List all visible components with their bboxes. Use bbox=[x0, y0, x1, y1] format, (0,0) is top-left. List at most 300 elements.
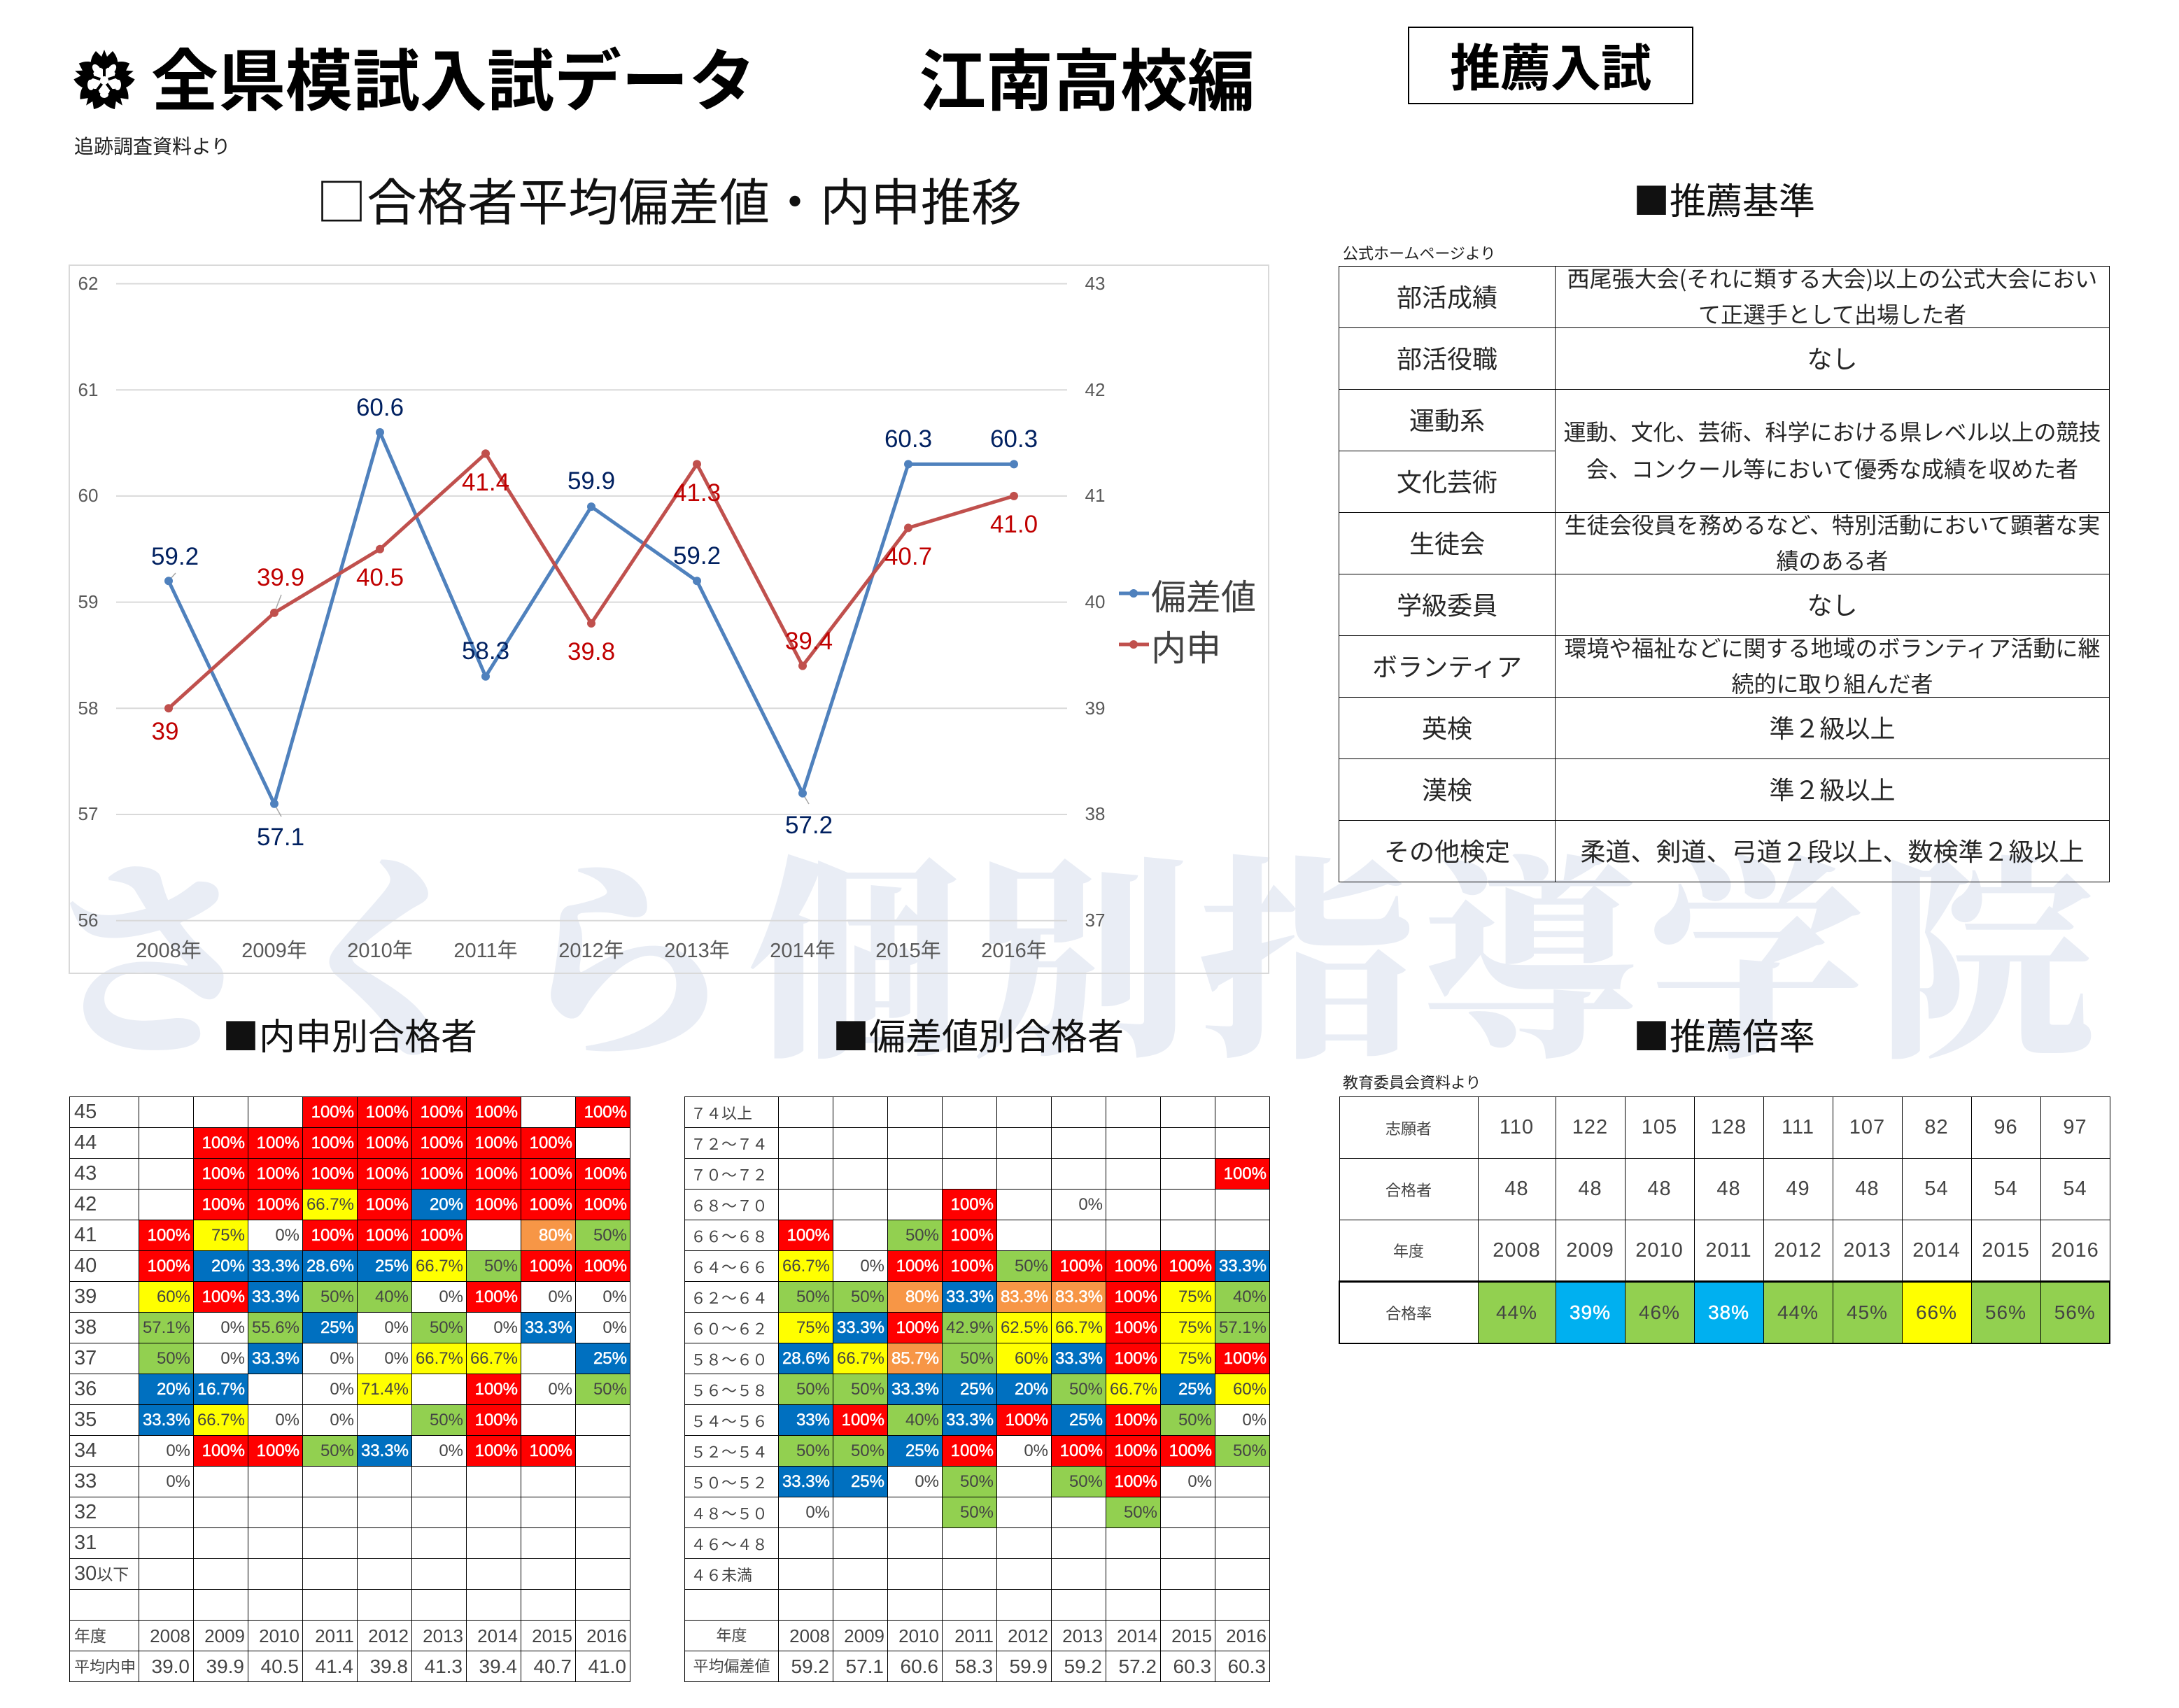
legend: 偏差値 bbox=[1151, 570, 1256, 620]
table: passers by deviation: 100% bbox=[1006, 1411, 1048, 1429]
table: passers by naishin: 50% bbox=[593, 1380, 627, 1398]
table: passers by deviation: ６８～７０ bbox=[691, 1194, 768, 1216]
table: passers by naishin: 55.6% bbox=[252, 1318, 299, 1336]
table: passers by deviation: 50% bbox=[851, 1287, 884, 1306]
table: passers by deviation: 50% bbox=[796, 1380, 830, 1398]
heading: passers by naishin: ■内申別合格者 bbox=[223, 1008, 477, 1060]
table: passers by deviation: 100% bbox=[1115, 1441, 1157, 1460]
table: recommendation ratio: 年度 bbox=[1393, 1239, 1424, 1262]
table: passers by naishin: 100% bbox=[257, 1441, 299, 1460]
table: recommendation criteria: 部活役職 bbox=[1397, 339, 1497, 375]
table: recommendation criteria: 生徒会役員を務めるなど、特別活動において顕著な実 bbox=[1565, 508, 2100, 540]
table: passers by naishin: 33.3% bbox=[252, 1257, 299, 1275]
data labels: deviation: 60.3 bbox=[884, 425, 932, 453]
table: recommendation criteria: 学級委員 bbox=[1397, 585, 1497, 621]
table: passers by naishin: 100% bbox=[475, 1380, 518, 1398]
badge: recommendation exam: 推薦入試 bbox=[1450, 27, 1651, 101]
table: passers by deviation: 2012 bbox=[1008, 1625, 1048, 1646]
data labels: deviation: 60.3 bbox=[990, 425, 1038, 453]
data labels: naishin: 39.9 bbox=[257, 564, 304, 591]
table: passers by naishin: 50% bbox=[430, 1318, 463, 1336]
legend: 内申 bbox=[1151, 621, 1221, 671]
table: passers by naishin: 100% bbox=[530, 1164, 572, 1183]
table: recommendation ratio: 107 bbox=[1849, 1116, 1885, 1138]
data labels: naishin: 39.4 bbox=[785, 628, 833, 655]
table: passers by naishin: 66.7% bbox=[416, 1349, 463, 1367]
table: passers by naishin: 66.7% bbox=[306, 1195, 354, 1213]
line chart: deviation and naishin: 39 bbox=[1085, 698, 1105, 719]
table: passers by naishin: 0% bbox=[602, 1287, 627, 1306]
table: passers by naishin: 100% bbox=[475, 1411, 518, 1429]
table: passers by deviation: 年度 bbox=[716, 1626, 747, 1644]
table: passers by naishin: 0% bbox=[439, 1287, 463, 1306]
table: recommendation ratio: 96 bbox=[1994, 1116, 2018, 1138]
table: passers by naishin: 43 bbox=[74, 1162, 97, 1185]
table: passers by naishin: 0% bbox=[439, 1441, 463, 1460]
table: passers by deviation: 0% bbox=[805, 1503, 830, 1521]
table: passers by deviation: 59.9 bbox=[1009, 1656, 1048, 1677]
line chart: deviation and naishin bbox=[69, 264, 1269, 974]
table: passers by deviation: 50% bbox=[960, 1472, 994, 1490]
table: passers by deviation: 100% bbox=[1169, 1257, 1212, 1275]
table: passers by deviation: 66.7% bbox=[837, 1349, 884, 1367]
table: passers by deviation: ６２～６４ bbox=[691, 1286, 768, 1308]
line chart: deviation and naishin: 58 bbox=[78, 698, 98, 719]
table: recommendation ratio: 39% bbox=[1570, 1301, 1611, 1323]
table: recommendation criteria: 部活成績 bbox=[1397, 277, 1497, 313]
table: passers by naishin: 0% bbox=[548, 1380, 572, 1398]
table: passers by naishin: 100% bbox=[421, 1164, 463, 1183]
table: passers by naishin: 2015 bbox=[532, 1625, 572, 1646]
table: passers by deviation: ６０～６２ bbox=[691, 1317, 768, 1339]
table: passers by naishin: 0% bbox=[602, 1318, 627, 1336]
table: passers by naishin: 2010 bbox=[259, 1625, 299, 1646]
table: passers by deviation: ４６未満 bbox=[691, 1563, 752, 1586]
table: passers by deviation: 2016 bbox=[1226, 1625, 1267, 1646]
table: passers by naishin: 0% bbox=[220, 1349, 245, 1367]
table: passers by naishin: 25% bbox=[375, 1257, 409, 1275]
table: passers by deviation: 0% bbox=[915, 1472, 939, 1490]
table: passers by naishin: 100% bbox=[311, 1226, 354, 1244]
table: passers by deviation: 57.2 bbox=[1118, 1656, 1157, 1677]
table: passers by naishin: 100% bbox=[530, 1441, 572, 1460]
table: passers by naishin: 33.3% bbox=[252, 1287, 299, 1306]
table: passers by naishin: 0% bbox=[548, 1287, 572, 1306]
line chart: deviation and naishin: 41 bbox=[1085, 485, 1105, 506]
data labels: deviation: 58.3 bbox=[462, 637, 509, 665]
table: recommendation ratio: 2011 bbox=[1705, 1238, 1752, 1261]
table: passers by deviation: 33.3% bbox=[946, 1287, 994, 1306]
table: passers by naishin: 28.6% bbox=[306, 1257, 354, 1275]
table: passers by naishin: 39.8 bbox=[369, 1656, 408, 1677]
source note: tracking survey: 追跡調査資料より bbox=[74, 132, 230, 160]
table: passers by naishin: 100% bbox=[475, 1441, 518, 1460]
table: recommendation ratio: 合格率 bbox=[1385, 1301, 1432, 1324]
table: passers by naishin: 33 bbox=[74, 1470, 97, 1492]
table: passers by deviation: ６４～６６ bbox=[691, 1255, 768, 1278]
table: passers by naishin: 0% bbox=[384, 1349, 409, 1367]
table: passers by naishin: 33.3% bbox=[252, 1349, 299, 1367]
table: passers by deviation: 2009 bbox=[844, 1625, 884, 1646]
table: passers by naishin: 100% bbox=[421, 1226, 463, 1244]
table: passers by naishin: 41.0 bbox=[588, 1656, 626, 1677]
data labels: deviation: 59.2 bbox=[151, 543, 199, 570]
table: recommendation criteria: 文化芸術 bbox=[1397, 462, 1497, 498]
data labels: naishin bbox=[152, 469, 1038, 745]
table: passers by deviation: 25% bbox=[905, 1441, 939, 1460]
table: passers by deviation: 59.2 bbox=[1064, 1656, 1102, 1677]
line chart: deviation and naishin: 2014年 bbox=[770, 939, 835, 962]
table: recommendation ratio: 46% bbox=[1639, 1301, 1680, 1323]
table: passers by deviation: 100% bbox=[896, 1257, 939, 1275]
table: passers by naishin: 34 bbox=[74, 1439, 97, 1462]
data labels: naishin: 39.8 bbox=[567, 638, 615, 665]
data labels: naishin: 41.3 bbox=[673, 479, 721, 507]
table: passers by naishin: 40% bbox=[375, 1287, 409, 1306]
table: passers by deviation: 100% bbox=[896, 1318, 939, 1336]
table: passers by deviation: 100% bbox=[951, 1257, 994, 1275]
table: passers by deviation: ７４以上 bbox=[691, 1101, 752, 1124]
table: passers by deviation: 60% bbox=[1233, 1380, 1267, 1398]
badge: recommendation exam bbox=[1408, 27, 1693, 104]
table: passers by deviation: 100% bbox=[787, 1226, 830, 1244]
line chart: deviation and naishin: 2016年 bbox=[981, 939, 1047, 962]
table: recommendation ratio: 2010 bbox=[1635, 1238, 1684, 1261]
table: recommendation ratio: 56% bbox=[1985, 1301, 2026, 1323]
table: passers by naishin: 16.7% bbox=[197, 1380, 245, 1398]
table: passers by naishin: 100% bbox=[311, 1103, 354, 1121]
data labels: deviation: 57.1 bbox=[257, 824, 304, 851]
table: recommendation ratio: 97 bbox=[2063, 1116, 2087, 1138]
data labels: deviation bbox=[151, 394, 1038, 851]
table: passers by deviation: 42.9% bbox=[946, 1318, 994, 1336]
table: recommendation ratio: 2008 bbox=[1493, 1238, 1541, 1261]
table: recommendation criteria: 柔道、剣道、弓道２段以上、数検準２級以上 bbox=[1580, 831, 2084, 868]
table: passers by deviation: 50% bbox=[1069, 1380, 1103, 1398]
table: passers by deviation: 33.3% bbox=[1219, 1257, 1267, 1275]
table: passers by deviation: 33.3% bbox=[946, 1411, 994, 1429]
table: passers by deviation: 80% bbox=[905, 1287, 939, 1306]
table: passers by deviation: 75% bbox=[1178, 1318, 1212, 1336]
table: passers by deviation: 75% bbox=[796, 1318, 830, 1336]
table: recommendation ratio: 128 bbox=[1711, 1116, 1747, 1138]
table: recommendation criteria: 会、コンクール等において優秀な成績を収めた者 bbox=[1586, 452, 2078, 484]
table: recommendation ratio: 2013 bbox=[1843, 1238, 1891, 1261]
table: passers by deviation: 100% bbox=[1115, 1257, 1157, 1275]
table: passers by deviation: 25% bbox=[1069, 1411, 1103, 1429]
table: passers by naishin: 31 bbox=[74, 1532, 97, 1554]
data labels: naishin: 41.0 bbox=[990, 511, 1038, 538]
table: passers by naishin: 年度 bbox=[74, 1627, 106, 1645]
table: passers by naishin: 39.4 bbox=[479, 1656, 517, 1677]
table: passers by deviation: ５２～５４ bbox=[691, 1440, 768, 1462]
table: passers by deviation: ７０～７２ bbox=[691, 1163, 768, 1185]
table: recommendation ratio bbox=[1339, 1096, 2110, 1344]
table: passers by deviation: 59.2 bbox=[791, 1656, 829, 1677]
table: passers by deviation: 62.5% bbox=[1001, 1318, 1048, 1336]
table: passers by naishin: 66.7% bbox=[416, 1257, 463, 1275]
table: passers by naishin: 100% bbox=[311, 1134, 354, 1152]
table: passers by naishin: 100% bbox=[366, 1226, 409, 1244]
table: recommendation ratio: 122 bbox=[1572, 1116, 1608, 1138]
table: passers by naishin: 35 bbox=[74, 1409, 97, 1431]
table: passers by naishin: 100% bbox=[257, 1195, 299, 1213]
table: passers by naishin: 0% bbox=[384, 1318, 409, 1336]
table: passers by deviation: 2010 bbox=[898, 1625, 939, 1646]
table: passers by naishin: 44 bbox=[74, 1131, 97, 1154]
table: passers by deviation: 33.3% bbox=[1055, 1349, 1103, 1367]
table: recommendation ratio: 2014 bbox=[1912, 1238, 1961, 1261]
table: passers by naishin: 25% bbox=[593, 1349, 627, 1367]
table: passers by deviation: 100% bbox=[1060, 1257, 1103, 1275]
table: recommendation criteria: その他検定 bbox=[1384, 831, 1510, 868]
source note: board of education: 教育委員会資料より bbox=[1343, 1071, 1481, 1093]
table: passers by naishin: 100% bbox=[421, 1134, 463, 1152]
table: recommendation ratio: 2016 bbox=[2051, 1238, 2099, 1261]
table: passers by deviation: ５８～６０ bbox=[691, 1348, 768, 1370]
table: passers by naishin: 57.1% bbox=[143, 1318, 190, 1336]
table: passers by deviation: 25% bbox=[960, 1380, 994, 1398]
line chart: deviation and naishin: 43 bbox=[1085, 273, 1105, 294]
table: passers by naishin bbox=[69, 1096, 630, 1682]
table: recommendation criteria: 運動系 bbox=[1409, 400, 1485, 437]
table: passers by naishin: 0% bbox=[493, 1318, 518, 1336]
table: passers by naishin: 平均内申 bbox=[74, 1658, 136, 1676]
table: passers by naishin: 0% bbox=[166, 1441, 190, 1460]
heading: average score trend: □合格者平均偏差値・内申推移 bbox=[316, 162, 1022, 235]
table: passers by naishin: 100% bbox=[421, 1103, 463, 1121]
series: deviation bbox=[164, 428, 1018, 808]
table: passers by deviation: 33.3% bbox=[782, 1472, 830, 1490]
table: recommendation ratio: 48 bbox=[1647, 1178, 1672, 1200]
table: passers by deviation: 0% bbox=[1024, 1441, 1048, 1460]
heading: passers by deviation: ■偏差値別合格者 bbox=[833, 1008, 1124, 1060]
table: passers by deviation: 50% bbox=[796, 1441, 830, 1460]
table: passers by deviation: 60.3 bbox=[1173, 1656, 1211, 1677]
title: 全県模試入試データ bbox=[151, 27, 756, 125]
table: passers by naishin: 100% bbox=[584, 1164, 627, 1183]
table: passers by deviation: 20% bbox=[1015, 1380, 1048, 1398]
line chart: deviation and naishin: 57 bbox=[78, 803, 98, 824]
table: passers by naishin: 100% bbox=[366, 1195, 409, 1213]
table: passers by deviation: 100% bbox=[842, 1411, 884, 1429]
table: passers by deviation: 2015 bbox=[1171, 1625, 1212, 1646]
table: passers by naishin: 100% bbox=[202, 1164, 245, 1183]
table: passers by deviation: 100% bbox=[1060, 1441, 1103, 1460]
table: passers by deviation: 100% bbox=[951, 1441, 994, 1460]
table: passers by naishin: 100% bbox=[475, 1134, 518, 1152]
table: passers by naishin: 66.7% bbox=[197, 1411, 245, 1429]
table: passers by naishin: 100% bbox=[202, 1195, 245, 1213]
table: passers by naishin: 40.5 bbox=[260, 1656, 299, 1677]
line chart: deviation and naishin: 56 bbox=[78, 910, 98, 931]
table: passers by deviation: 50% bbox=[1178, 1411, 1212, 1429]
table: passers by deviation: 100% bbox=[1169, 1441, 1212, 1460]
table: recommendation ratio: 111 bbox=[1782, 1116, 1814, 1138]
table: passers by naishin: 2011 bbox=[315, 1625, 354, 1646]
table: passers by deviation: 58.3 bbox=[954, 1656, 993, 1677]
table: passers by naishin: 80% bbox=[539, 1226, 572, 1244]
table: passers by naishin: 45 bbox=[74, 1101, 97, 1123]
table: passers by naishin: 100% bbox=[148, 1257, 190, 1275]
table: passers by deviation: ５６～５８ bbox=[691, 1378, 768, 1401]
table: passers by deviation: 75% bbox=[1178, 1349, 1212, 1367]
table: passers by deviation: 40% bbox=[1233, 1287, 1267, 1306]
table: passers by deviation: 平均偏差値 bbox=[693, 1657, 770, 1675]
table: passers by naishin: 100% bbox=[584, 1195, 627, 1213]
table: recommendation criteria: 続的に取り組んだ者 bbox=[1731, 666, 1933, 698]
table: passers by deviation: 100% bbox=[1115, 1411, 1157, 1429]
table: recommendation criteria: なし bbox=[1807, 585, 1857, 621]
data labels: naishin: 41.4 bbox=[462, 469, 509, 496]
table: recommendation ratio: 54 bbox=[1924, 1178, 1949, 1200]
table: passers by naishin: 60% bbox=[157, 1287, 190, 1306]
table: recommendation criteria: 生徒会 bbox=[1409, 523, 1485, 560]
table: passers by naishin: 50% bbox=[484, 1257, 518, 1275]
table: passers by naishin: 41.3 bbox=[424, 1656, 463, 1677]
data labels: deviation: 60.6 bbox=[356, 394, 404, 421]
table: recommendation criteria bbox=[1339, 262, 2110, 882]
table: passers by naishin: 33.3% bbox=[525, 1318, 572, 1336]
table: passers by deviation: 57.1% bbox=[1219, 1318, 1267, 1336]
line chart: deviation and naishin: 38 bbox=[1085, 803, 1105, 824]
table: passers by deviation: 60.3 bbox=[1227, 1656, 1266, 1677]
table: passers by deviation: 50% bbox=[1233, 1441, 1267, 1460]
table: passers by naishin: 100% bbox=[257, 1164, 299, 1183]
table: passers by deviation: 40% bbox=[905, 1411, 939, 1429]
table: recommendation criteria: 環境や福祉などに関する地域のボランティア活動に継 bbox=[1564, 631, 2101, 663]
table: passers by deviation: 60% bbox=[1015, 1349, 1048, 1367]
data labels: naishin: 40.5 bbox=[356, 564, 404, 591]
table: recommendation criteria: ボランティア bbox=[1372, 647, 1522, 683]
table: passers by naishin: 75% bbox=[211, 1226, 245, 1244]
table: recommendation ratio: 54 bbox=[1994, 1178, 2018, 1200]
table: recommendation criteria: 運動、文化、芸術、科学における県レベル以上の競技 bbox=[1563, 414, 2101, 446]
table: passers by naishin: 100% bbox=[475, 1164, 518, 1183]
table: passers by deviation: 83.3% bbox=[1055, 1287, 1103, 1306]
table: recommendation ratio: 45% bbox=[1847, 1301, 1888, 1323]
table: passers by deviation: ４６～４８ bbox=[691, 1532, 768, 1555]
table: passers by naishin: 100% bbox=[530, 1257, 572, 1275]
table: passers by deviation: 33% bbox=[796, 1411, 830, 1429]
table: passers by deviation: 25% bbox=[851, 1472, 884, 1490]
table: passers by deviation: 57.1 bbox=[845, 1656, 884, 1677]
table: passers by deviation: 33.3% bbox=[837, 1318, 884, 1336]
table: passers by naishin: 33.3% bbox=[143, 1411, 190, 1429]
table: passers by naishin: 32 bbox=[74, 1501, 97, 1523]
table: passers by deviation: 100% bbox=[1115, 1287, 1157, 1306]
table: passers by deviation: ４８～５０ bbox=[691, 1502, 768, 1524]
table: passers by deviation: ５０～５２ bbox=[691, 1471, 768, 1493]
table: recommendation ratio: 54 bbox=[2063, 1178, 2087, 1200]
table: recommendation ratio: 合格者 bbox=[1385, 1178, 1432, 1201]
table: passers by naishin: 40.7 bbox=[533, 1656, 572, 1677]
table: recommendation criteria: 績のある者 bbox=[1776, 543, 1888, 575]
table: passers by naishin: 100% bbox=[584, 1103, 627, 1121]
table: recommendation criteria: 西尾張大会(それに類する大会)以上の公式大会におい bbox=[1567, 262, 2097, 294]
table: recommendation ratio: 66% bbox=[1916, 1301, 1957, 1323]
data labels: deviation: 59.9 bbox=[567, 467, 615, 495]
table: passers by naishin: 38 bbox=[74, 1316, 97, 1339]
table: passers by naishin: 100% bbox=[475, 1287, 518, 1306]
table: passers by deviation: 100% bbox=[1115, 1472, 1157, 1490]
line chart: deviation and naishin: 2012年 bbox=[558, 939, 624, 962]
table: passers by naishin: 100% bbox=[311, 1164, 354, 1183]
table: passers by deviation: 66.7% bbox=[782, 1257, 830, 1275]
table: passers by deviation: 50% bbox=[1069, 1472, 1103, 1490]
table: passers by naishin: 0% bbox=[330, 1349, 354, 1367]
line chart: deviation and naishin: 2011年 bbox=[453, 939, 518, 962]
table: passers by deviation bbox=[684, 1096, 1270, 1682]
table: passers by naishin: 100% bbox=[584, 1257, 627, 1275]
table: recommendation ratio: 48 bbox=[1504, 1178, 1529, 1200]
line chart: deviation and naishin: 62 bbox=[78, 273, 98, 294]
table: passers by naishin: 39.0 bbox=[151, 1656, 190, 1677]
table: passers by deviation: 83.3% bbox=[1001, 1287, 1048, 1306]
table: recommendation ratio: 2012 bbox=[1774, 1238, 1822, 1261]
table: passers by deviation: 50% bbox=[960, 1349, 994, 1367]
table: recommendation criteria: なし bbox=[1807, 339, 1857, 375]
table: passers by naishin: 100% bbox=[202, 1441, 245, 1460]
table: passers by naishin: 71.4% bbox=[361, 1380, 409, 1398]
table: passers by naishin: 20% bbox=[211, 1257, 245, 1275]
table: recommendation criteria: て正選手として出場した者 bbox=[1698, 297, 1966, 329]
table: passers by naishin: 39 bbox=[74, 1285, 97, 1308]
data labels: deviation: 57.2 bbox=[785, 812, 833, 839]
table: passers by deviation: 100% bbox=[951, 1226, 994, 1244]
table: passers by naishin: 50% bbox=[320, 1441, 354, 1460]
table: passers by naishin: 100% bbox=[366, 1103, 409, 1121]
table: passers by deviation: 0% bbox=[860, 1257, 884, 1275]
table: passers by deviation: 50% bbox=[851, 1380, 884, 1398]
series: naishin bbox=[164, 449, 1018, 712]
table: passers by deviation: 50% bbox=[1015, 1257, 1048, 1275]
table: passers by naishin: 37 bbox=[74, 1347, 97, 1369]
table: passers by deviation: 50% bbox=[796, 1287, 830, 1306]
table: passers by naishin: 100% bbox=[530, 1195, 572, 1213]
table: passers by naishin: 20% bbox=[430, 1195, 463, 1213]
table: passers by naishin: 30以下 bbox=[74, 1562, 129, 1585]
line chart: deviation and naishin: 37 bbox=[1085, 910, 1105, 931]
table: recommendation criteria: 漢検 bbox=[1422, 770, 1472, 806]
line chart: deviation and naishin: 40 bbox=[1085, 591, 1105, 612]
table: passers by deviation: 100% bbox=[1115, 1349, 1157, 1367]
table: passers by naishin: 50% bbox=[320, 1287, 354, 1306]
table: passers by deviation: 60.6 bbox=[900, 1656, 938, 1677]
table: passers by naishin: 2014 bbox=[477, 1625, 518, 1646]
table: passers by naishin: 0% bbox=[166, 1472, 190, 1490]
table: passers by naishin: 39.9 bbox=[206, 1656, 244, 1677]
table: recommendation criteria: 英検 bbox=[1422, 708, 1472, 744]
table: passers by naishin: 100% bbox=[475, 1195, 518, 1213]
table: passers by deviation: 50% bbox=[851, 1441, 884, 1460]
table: passers by naishin: 50% bbox=[430, 1411, 463, 1429]
line chart: deviation and naishin: 2013年 bbox=[664, 939, 730, 962]
heading: recommendation ratio: ■推薦倍率 bbox=[1633, 1008, 1815, 1060]
table: passers by naishin: 100% bbox=[366, 1134, 409, 1152]
line chart: deviation and naishin: 60 bbox=[78, 485, 98, 506]
table: passers by deviation: 75% bbox=[1178, 1287, 1212, 1306]
table: passers by naishin: 50% bbox=[157, 1349, 190, 1367]
table: passers by naishin: 0% bbox=[275, 1411, 299, 1429]
table: passers by deviation: 50% bbox=[905, 1226, 939, 1244]
table: recommendation ratio: 48 bbox=[1716, 1178, 1741, 1200]
table: passers by deviation: 50% bbox=[1124, 1503, 1157, 1521]
table: passers by deviation: 28.6% bbox=[782, 1349, 830, 1367]
line chart: deviation and naishin: 2015年 bbox=[875, 939, 941, 962]
table: recommendation criteria: 準２級以上 bbox=[1769, 770, 1895, 806]
table: recommendation ratio: 82 bbox=[1924, 1116, 1949, 1138]
